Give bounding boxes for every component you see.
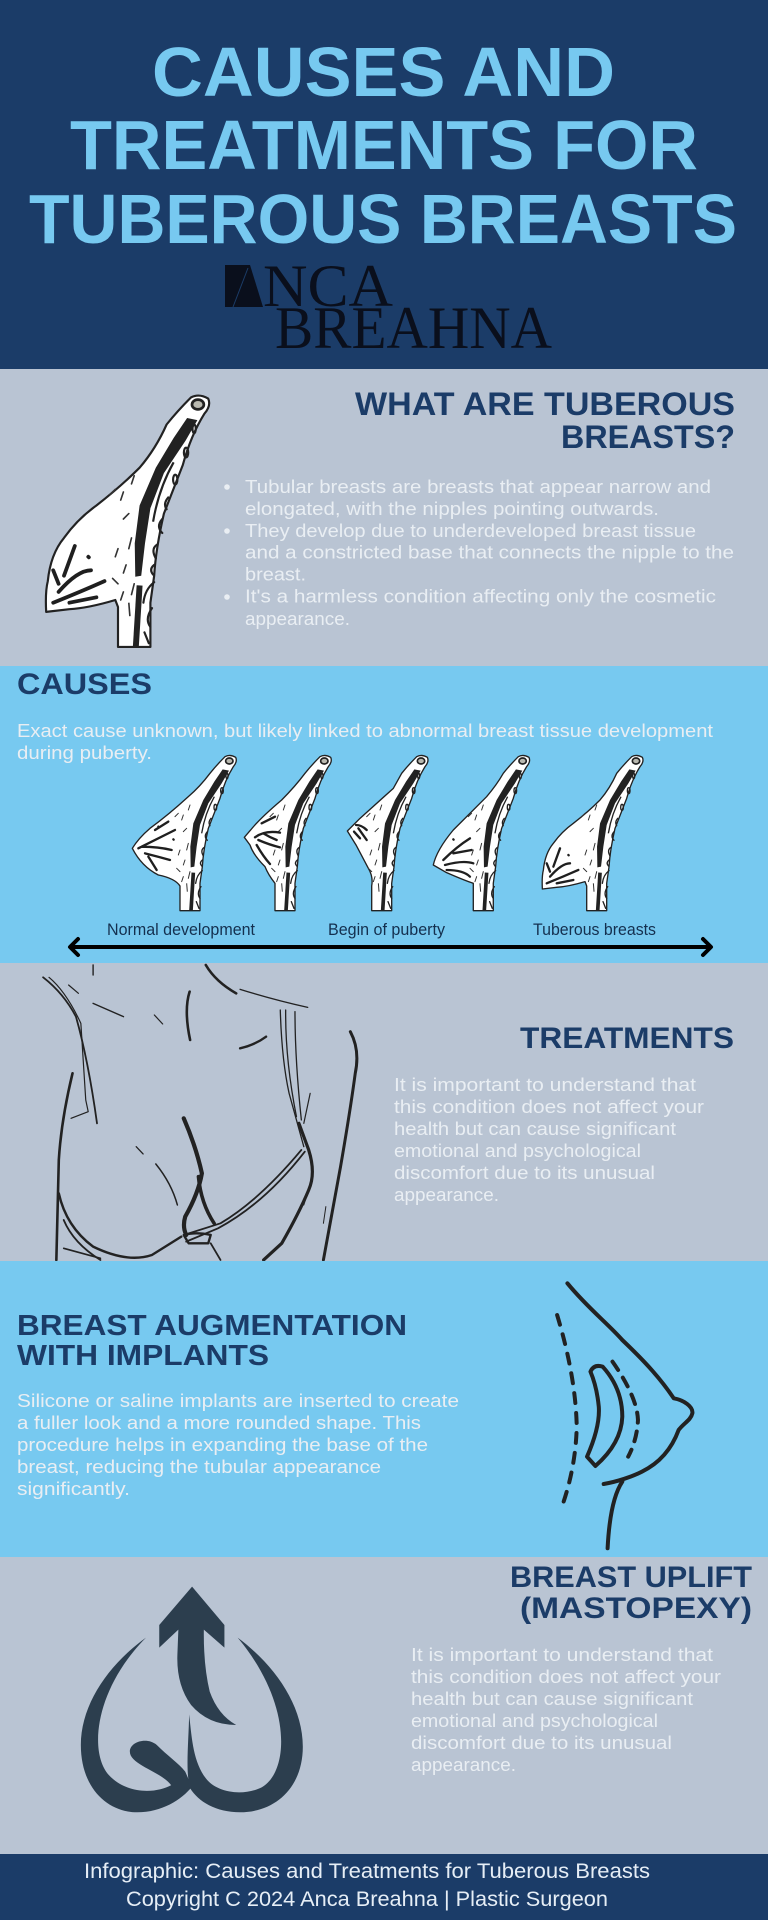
logo: Anca Breahna: NCA [263,253,393,319]
heading: what are tuberous breasts: WHAT ARE TUBEROUS [355,386,735,422]
labels: development scale: Begin of puberty [328,920,445,939]
heading: breast augmentation with implants: WITH IMPLANTS [17,1340,269,1372]
text: augmentation description: procedure helps in expanding the base of the [17,1434,428,1455]
bullet list: breast. [245,564,306,584]
text: treatments description: health but can cause significant [394,1118,676,1139]
text: footer credit [84,1860,650,1911]
title: TREATMENTS FOR [70,106,698,184]
heading: causes: CAUSES [17,668,152,701]
heading: breast uplift (mastopexy): (MASTOPEXY) [520,1592,752,1625]
heading: breast augmentation with implants [17,1310,407,1372]
panel: breast uplift [0,1557,768,1854]
panel: breast augmentation [0,1261,768,1557]
arrow: double-headed development scale [70,939,711,955]
title: TUBEROUS BREASTS [29,180,737,258]
illustration: breast stage 4 [433,755,530,911]
labels: development scale: Tuberous breasts [533,920,656,939]
text: treatments description: this condition does not affect your [394,1096,704,1117]
text: exact cause unknown: Exact cause unknown, but likely linked to abnormal breast tissue development [17,720,713,741]
illustration: breast stage 3 [347,755,428,911]
panel: causes [0,666,768,963]
illustration: uplift arrow and heart icon [81,1587,303,1812]
text: uplift description [411,1644,721,1775]
heading: breast augmentation with implants: BREAST AUGMENTATION [17,1310,407,1342]
bullet list: Tubular breasts are breasts that appear narrow and [245,476,711,497]
bullet list: It's a harmless condition affecting only the cosmetic [245,586,716,606]
text: augmentation description: Silicone or saline implants are inserted to create [17,1390,459,1411]
logo: Anca Breahna: BREAHNA [275,295,552,361]
heading: what are tuberous breasts [355,386,735,455]
text: exact cause unknown: during puberty. [17,742,152,763]
text: augmentation description: a fuller look and a more rounded shape. This [17,1412,421,1433]
text: uplift description: discomfort due to its unusual [411,1732,672,1753]
logo: Anca Breahna: A [229,253,259,319]
title: CAUSES AND [152,33,615,111]
text: uplift description: this condition does not affect your [411,1666,721,1687]
text: uplift description: appearance. [411,1754,516,1775]
text: treatments description: discomfort due to its unusual [394,1162,655,1183]
text: treatments description: emotional and psychological [394,1140,641,1161]
panel: treatments [0,963,768,1261]
heading: treatments: TREATMENTS [520,1022,734,1055]
heading: breast uplift (mastopexy): BREAST UPLIFT [510,1561,752,1594]
bullet list: and a constricted base that connects the nipple to the [245,542,734,562]
text: exact cause unknown [17,720,713,763]
text: treatments description [394,1074,704,1205]
bullet list: elongated, with the nipples pointing outwards. [245,498,659,519]
text: uplift description: It is important to understand that [411,1644,713,1665]
text: footer credit: Copyright C 2024 Anca Breahna | Plastic Surgeon [126,1888,608,1911]
bullet list: appearance. [245,608,350,629]
heading: what are tuberous breasts: BREASTS? [561,419,735,455]
text: treatments description: It is important to understand that [394,1074,696,1095]
labels: development scale [107,920,656,939]
bullet list: They develop due to underdeveloped breast tissue [245,520,696,541]
title [29,33,737,258]
bullet list [224,476,734,629]
illustration: breast stage 2 [244,755,331,911]
panel: header [0,0,768,369]
illustration: breast stage 1 [132,755,236,911]
labels: development scale: Normal development [107,920,255,939]
illustration: breast implant diagram [557,1283,692,1548]
illustration: tuberous breast cross-section [46,396,209,647]
text: treatments description: appearance. [394,1184,499,1205]
text: augmentation description: breast, reducing the tubular appearance [17,1456,381,1477]
text: augmentation description [17,1390,459,1499]
heading: breast uplift (mastopexy) [510,1561,752,1625]
panel: footer [0,1854,768,1920]
text: augmentation description: significantly. [17,1478,130,1499]
illustration: torso line drawing [43,965,357,1260]
illustration: breast stage 5 [542,755,643,911]
text: uplift description: health but can cause significant [411,1688,693,1709]
text: uplift description: emotional and psychological [411,1710,658,1731]
panel: what are tuberous breasts [0,369,768,666]
text: footer credit: Infographic: Causes and Treatments for Tuberous Breasts [84,1860,650,1883]
logo: Anca Breahna [225,253,552,361]
